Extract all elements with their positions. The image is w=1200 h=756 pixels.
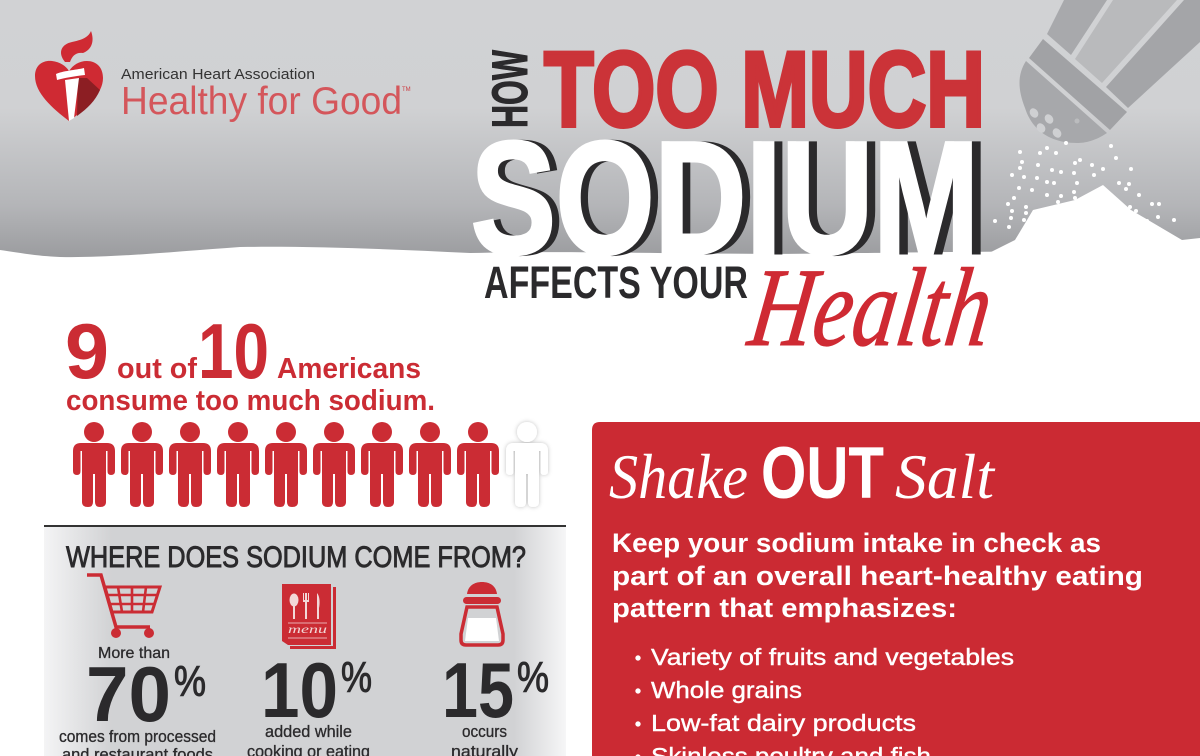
menu label: menu [288,622,327,636]
stat: 10 percent [247,646,372,756]
icon: shopping cart [87,575,160,638]
number 9: 9 [65,307,109,395]
percent sign: % [174,658,206,706]
label: More than: More than [98,645,170,662]
salt pile [989,185,1200,270]
trademark: TM [402,87,411,93]
words: out of: out of [117,353,197,385]
heading: Shake OUT Salt [609,433,996,514]
panel background [592,422,1200,756]
header background [0,0,1200,257]
logo name: American Heart Association [121,66,315,83]
panel: shake out salt [592,422,1200,756]
title word: HOW: HOW [482,49,538,128]
icon: salt shaker [461,582,503,645]
caption: occurs [462,722,507,741]
one white person [506,422,548,507]
caption: added while [265,722,352,741]
title word shadow: SODIUM: SODIUM [478,108,988,287]
logo: American Heart Association Healthy for Good [35,31,411,123]
bullet list: Whole grains [651,677,802,703]
percent sign: % [341,654,372,702]
stat: more than 70 percent [59,645,216,756]
shaker holes [1028,107,1080,139]
number 10: 10 [198,307,269,395]
word: Americans: Americans [277,353,421,385]
statistic: 9 out of 10 Americans [65,307,435,417]
intro text [612,528,1143,623]
percent sign: % [517,654,549,702]
intro text: part of an overall heart-healthy eating [612,561,1143,591]
falling salt grains [993,141,1176,231]
title words: TOO MUCH: TOO MUCH [544,29,985,149]
line: consume too much sodium: consume too much sodium. [66,385,435,417]
icon: menu book [282,584,336,649]
intro text: pattern that emphasizes: [612,593,957,623]
logo tagline: Healthy for Good [121,80,402,123]
caption: comes from processed [59,728,216,746]
heading: Shake OUT Salt: Shake [609,441,748,512]
number 10: 10 [261,646,338,734]
title word: SODIUM: SODIUM [471,108,979,287]
bullet list [636,644,1014,756]
shaker body [1047,0,1107,55]
pictogram: ten people [73,422,548,507]
panel: where does sodium come from [44,525,566,756]
number 70: 70 [86,650,171,738]
nine red people [73,422,499,507]
salt shaker illustration [1020,0,1200,143]
bullet list: Variety of fruits and vegetables [651,644,1014,670]
bullet list: Low-fat dairy products [651,710,916,736]
panel background [44,526,566,756]
title words: AFFECTS YOUR: AFFECTS YOUR [484,257,748,308]
stat: 15 percent [442,646,549,756]
number 15: 15 [442,646,514,734]
title [471,29,1000,370]
intro text: Keep your sodium intake in check as [612,528,1101,558]
title word: Health: Health [741,246,1000,370]
heading: WHERE DOES SODIUM COME FROM? [66,541,526,574]
heading: Shake OUT Salt: OUT [761,433,884,514]
heading: Shake OUT Salt: Salt [895,441,996,512]
icon: heart and torch [35,31,103,121]
